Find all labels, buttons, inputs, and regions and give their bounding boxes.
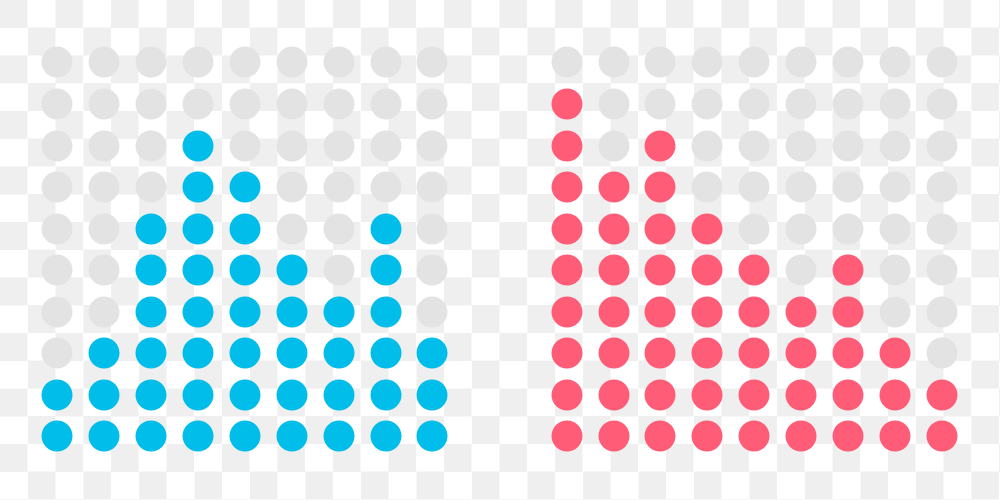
chart: red dot matrix xyxy=(552,46,958,452)
grey background dots xyxy=(552,46,958,368)
red data dots xyxy=(552,88,958,452)
blue data dots xyxy=(42,130,448,452)
grey background dots xyxy=(42,46,448,368)
chart: blue dot matrix xyxy=(42,46,448,452)
